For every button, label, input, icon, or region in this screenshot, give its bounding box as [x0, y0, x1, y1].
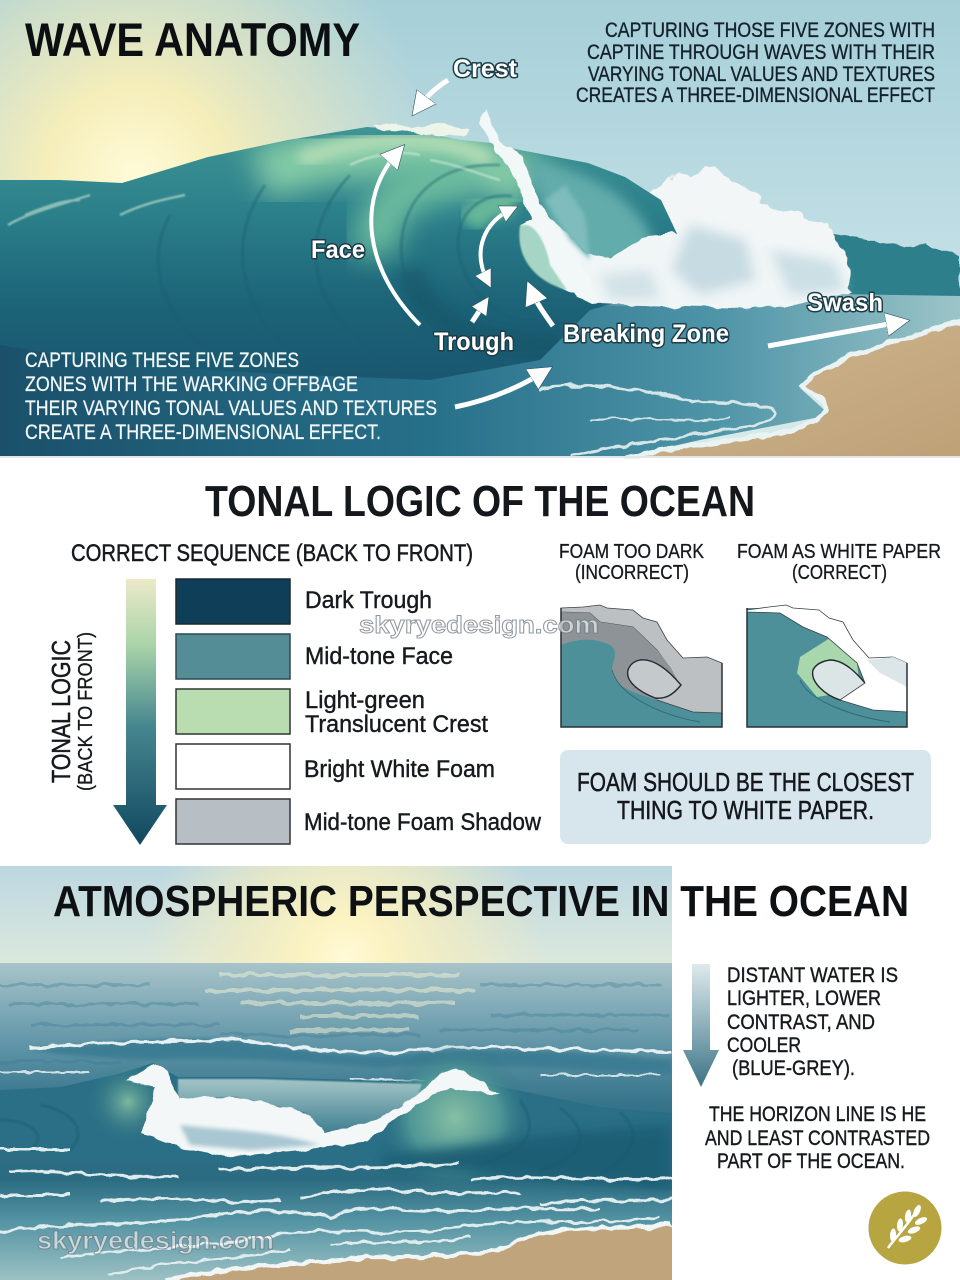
label: trough: Trough: [434, 328, 514, 356]
sea ripples dark: [0, 985, 670, 1062]
arrow: text to sea: [455, 372, 544, 407]
foam front: [574, 232, 850, 308]
diagram: incorrect wave: [561, 605, 722, 727]
crest spray: [372, 122, 470, 137]
text block: bottom left: THEIR VARYING TONAL VALUES AND TEXTURES: [25, 397, 437, 420]
foreground ripples: [0, 1150, 672, 1275]
breaking wave foam: [125, 1062, 500, 1157]
caption: foam too dark: FOAM TOO DARK: [559, 541, 705, 563]
swatch labels: Dark Trough: [305, 587, 432, 614]
distant wave on right: [830, 232, 960, 320]
breaking wave body: [0, 1063, 672, 1190]
text block: bottom left: ZONES WITH THE WARKING OFFBAGE: [25, 373, 358, 396]
caption: foam as white paper: (CORRECT): [792, 562, 887, 584]
shoreline foam: [165, 1225, 672, 1280]
panel: wave anatomy scene: [0, 0, 960, 458]
text block: distant water: DISTANT WATER IS: [727, 964, 898, 987]
swatch labels: Translucent Crest: [305, 711, 488, 738]
panel: atmospheric ocean scene: [0, 866, 672, 1280]
distant swells: [30, 1039, 672, 1075]
text block: top right: [576, 19, 935, 107]
wave streaks: [0, 1100, 630, 1150]
swatch: mid-tone face: [176, 634, 290, 679]
label: face: Face: [311, 236, 365, 264]
sun glitter: [205, 975, 475, 1030]
swatch list: [176, 579, 290, 844]
sand: [165, 1225, 672, 1280]
arrow: swash: [768, 322, 900, 346]
text block: horizon line: THE HORIZON LINE IS HE: [709, 1103, 926, 1126]
text block: distant water: COOLER: [727, 1034, 801, 1057]
caption: foam too dark: [559, 541, 705, 584]
arrow: breaking zone up: [531, 290, 553, 326]
callout: THING TO WHITE PAPER.: [617, 795, 874, 825]
callout: [560, 750, 931, 844]
title: WAVE ANATOMY: [25, 13, 360, 66]
vertical labels: tonal logic: [46, 632, 97, 791]
shore foam: [540, 322, 960, 458]
swatch: dark trough: [176, 579, 290, 624]
swatch labels: [304, 587, 542, 836]
text block: bottom left: CREATE A THREE-DIMENSIONAL EFFECT.: [25, 421, 381, 444]
text block: horizon line: [705, 1103, 930, 1173]
watermark: center: skyryedesign.com: [359, 612, 599, 639]
caption: foam too dark: (INCORRECT): [575, 562, 689, 584]
swatch labels: Mid-tone Face: [305, 643, 453, 670]
label: breaking zone: Breaking Zone: [563, 320, 729, 348]
arrow: trough up: [472, 304, 484, 322]
subheading: correct sequence: CORRECT SEQUENCE (BACK TO FRONT): [71, 540, 473, 567]
swatch labels: Mid-tone Foam Shadow: [304, 809, 542, 836]
wave shading and barrel: [8, 139, 655, 372]
text block: distant water: LIGHTER, LOWER: [727, 987, 881, 1010]
swatch labels: Bright White Foam: [304, 756, 495, 783]
vertical labels: tonal logic: TONAL LOGIC: [46, 640, 76, 783]
text block: bottom left: [25, 349, 437, 444]
swatch labels: Light-green: [305, 687, 425, 714]
arrow: face: [371, 152, 420, 325]
label: swash: Swash: [807, 289, 883, 317]
swatch: light green: [176, 689, 290, 734]
arrow: trough double: [481, 210, 510, 280]
arrow: atmospheric gradient: [683, 964, 719, 1087]
foam cloud: [590, 165, 850, 308]
sea: [0, 280, 960, 458]
main wave body: [0, 127, 680, 380]
diagram: correct wave: [747, 605, 907, 727]
caption: foam as white paper: [737, 541, 941, 584]
watermark: bottom: skyryedesign.com: [37, 1227, 274, 1255]
swatch: white foam: [176, 744, 290, 789]
text block: distant water: (BLUE-GREY).: [732, 1057, 855, 1080]
text block: horizon line: PART OF THE OCEAN.: [717, 1150, 905, 1173]
label: crest: Crest: [453, 55, 518, 83]
arrow: crest: [418, 80, 448, 108]
heading: tonal logic: TONAL LOGIC OF THE OCEAN: [205, 477, 755, 526]
curl and lip foam: [478, 110, 632, 304]
sand: [625, 322, 960, 458]
icon: gold leaf badge: [868, 1192, 942, 1264]
vertical labels: tonal logic: (BACK TO FRONT): [75, 632, 97, 791]
text block: distant water: CONTRAST, AND: [727, 1011, 875, 1034]
arrow: tonal gradient: [113, 579, 167, 845]
text block: distant water: [727, 964, 898, 1080]
text block: bottom left: CAPTURING THESE FIVE ZONES: [25, 349, 299, 372]
swatch: foam shadow: [176, 799, 290, 844]
